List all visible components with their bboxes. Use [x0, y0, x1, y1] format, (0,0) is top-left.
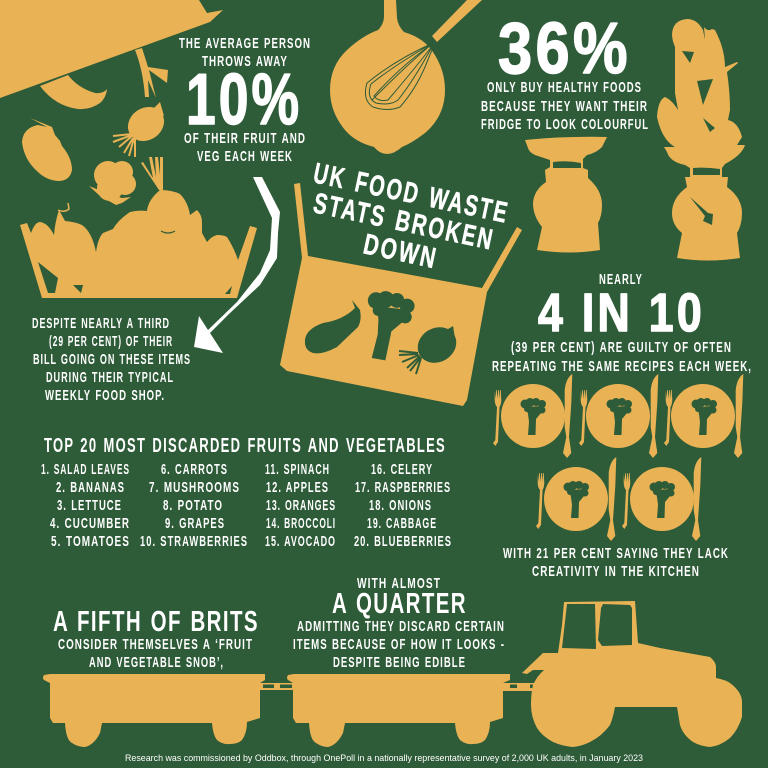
illustration: empty weighing scale: [525, 137, 607, 252]
text: 36%: BECAUSE THEY WANT THEIR: [481, 98, 648, 115]
title: DOWN: [361, 229, 441, 275]
list: discarded fruits and vegetables: 1. SALAD LEAVES: [41, 461, 130, 478]
text: average person throws away 10%: OF THEIR FRUIT AND: [184, 130, 306, 147]
icon: place setting 2: [579, 374, 658, 458]
list: discarded fruits and vegetables: 5. TOMATOES: [51, 533, 130, 550]
text: almost a quarter: WITH ALMOST: [357, 575, 441, 592]
illustration: place settings: [493, 374, 743, 541]
illustration: trailer two: [287, 674, 535, 747]
heading: top 20 list: TOP 20 MOST DISCARDED FRUITS AND VEGETABLES: [44, 435, 446, 457]
text: average person throws away 10%: VEG EACH WEEK: [197, 148, 293, 165]
list: discarded fruits and vegetables: 18. ONIONS: [369, 497, 432, 514]
text: nearly 4 in 10: [492, 271, 752, 375]
text: a fifth of brits: [53, 606, 259, 671]
text: nearly 4 in 10: NEARLY: [599, 271, 643, 288]
text: lack creativity: [503, 545, 729, 580]
list: discarded fruits and vegetables: 6. CARROTS: [161, 461, 228, 478]
illustration: falling potato: [22, 118, 72, 181]
list: discarded fruits and vegetables: 16. CELERY: [371, 461, 433, 478]
footer: research note: Research was commissioned by Oddbox, through OnePoll in a nationally representative survey of 2,000 UK adults, in January 2023: [125, 753, 643, 764]
icon: place setting 3: [664, 374, 743, 458]
illustration: open cardboard box: [280, 183, 522, 406]
text: a fifth of brits: CONSIDER THEMSELVES A ‘FRUIT: [58, 636, 253, 653]
list: discarded fruits and vegetables: 10. STRAWBERRIES: [140, 533, 248, 550]
icon: place setting 5: [622, 457, 701, 541]
illustration: tractor: [522, 601, 742, 747]
illustration: tipping sack: [0, 0, 223, 109]
text: nearly a third of bill: WEEKLY FOOD SHOP.: [45, 387, 165, 404]
text: nearly a third of bill: DURING THEIR TYPICAL: [46, 369, 174, 386]
title: STATS BROKEN: [311, 188, 497, 257]
list: discarded fruits and vegetables: [41, 461, 452, 550]
list: discarded fruits and vegetables: 17. RASPBERRIES: [355, 479, 451, 496]
text: average person throws away 10%: THROWS AWAY: [202, 53, 288, 70]
illustration: weighing scale with fruit stack: [657, 19, 745, 260]
title: UK FOOD WASTE: [311, 158, 512, 230]
icon: onion: [399, 320, 463, 374]
text: nearly a third of bill: (29 PER CENT) OF THEIR: [49, 333, 173, 350]
list: discarded fruits and vegetables: 8. POTATO: [163, 497, 223, 514]
list: discarded fruits and vegetables: 12. APPLES: [266, 479, 329, 496]
text: nearly 4 in 10: 4 IN 10: [538, 283, 705, 343]
list: discarded fruits and vegetables: 15. AVOCADO: [265, 533, 336, 550]
list: discarded fruits and vegetables: 9. GRAPES: [165, 515, 225, 532]
icon: broccoli: [358, 288, 416, 364]
text: almost a quarter: ADMITTING THEY DISCARD CERTAIN: [297, 618, 505, 635]
icon: aubergine: [305, 300, 361, 353]
text: a fifth of brits: AND VEGETABLE SNOB’,: [89, 654, 224, 671]
text: 36%: ONLY BUY HEALTHY FOODS: [487, 79, 642, 96]
text: average person throws away 10%: [179, 35, 311, 165]
list: discarded fruits and vegetables: 11. SPINACH: [265, 461, 330, 478]
list: discarded fruits and vegetables: 14. BROCCOLI: [266, 515, 336, 532]
text: average person throws away 10%: 10%: [186, 60, 302, 140]
text: almost a quarter: [293, 575, 505, 671]
text: almost a quarter: A QUARTER: [332, 588, 467, 620]
illustration: falling cauliflower: [89, 161, 136, 205]
text: 36%: 36%: [498, 9, 631, 89]
text: a fifth of brits: A FIFTH OF BRITS: [53, 606, 259, 638]
illustration: trailer one: [43, 674, 293, 747]
list: discarded fruits and vegetables: 2. BANANAS: [56, 479, 125, 496]
text: 36%: [481, 9, 649, 133]
illustration: pan with whisk: [330, 0, 482, 154]
list: discarded fruits and vegetables: 13. ORANGES: [266, 497, 336, 514]
text: nearly a third of bill: DESPITE NEARLY A THIRD: [32, 315, 170, 332]
title: [311, 158, 512, 275]
text: 36%: FRIDGE TO LOOK COLOURFUL: [481, 116, 649, 133]
arrow: [194, 177, 280, 353]
text: nearly a third of bill: [32, 315, 191, 404]
illustration: basket of vegetables: [20, 157, 257, 298]
text: nearly a third of bill: BILL GOING ON THESE ITEMS: [33, 351, 191, 368]
list: discarded fruits and vegetables: 19. CABBAGE: [367, 515, 437, 532]
illustration: falling onion: [113, 48, 171, 157]
icon: place setting 4: [536, 457, 616, 541]
text: almost a quarter: DESPITE BEING EDIBLE: [333, 654, 466, 671]
list: discarded fruits and vegetables: 20. BLUEBERRIES: [354, 533, 452, 550]
icon: place setting 1: [493, 374, 572, 458]
list: discarded fruits and vegetables: 7. MUSHROOMS: [149, 479, 240, 496]
list: discarded fruits and vegetables: 3. LETTUCE: [57, 497, 122, 514]
text: almost a quarter: ITEMS BECAUSE OF HOW IT LOOKS -: [293, 636, 505, 653]
list: discarded fruits and vegetables: 4. CUCUMBER: [50, 515, 130, 532]
text: average person throws away 10%: THE AVERAGE PERSON: [179, 35, 311, 52]
